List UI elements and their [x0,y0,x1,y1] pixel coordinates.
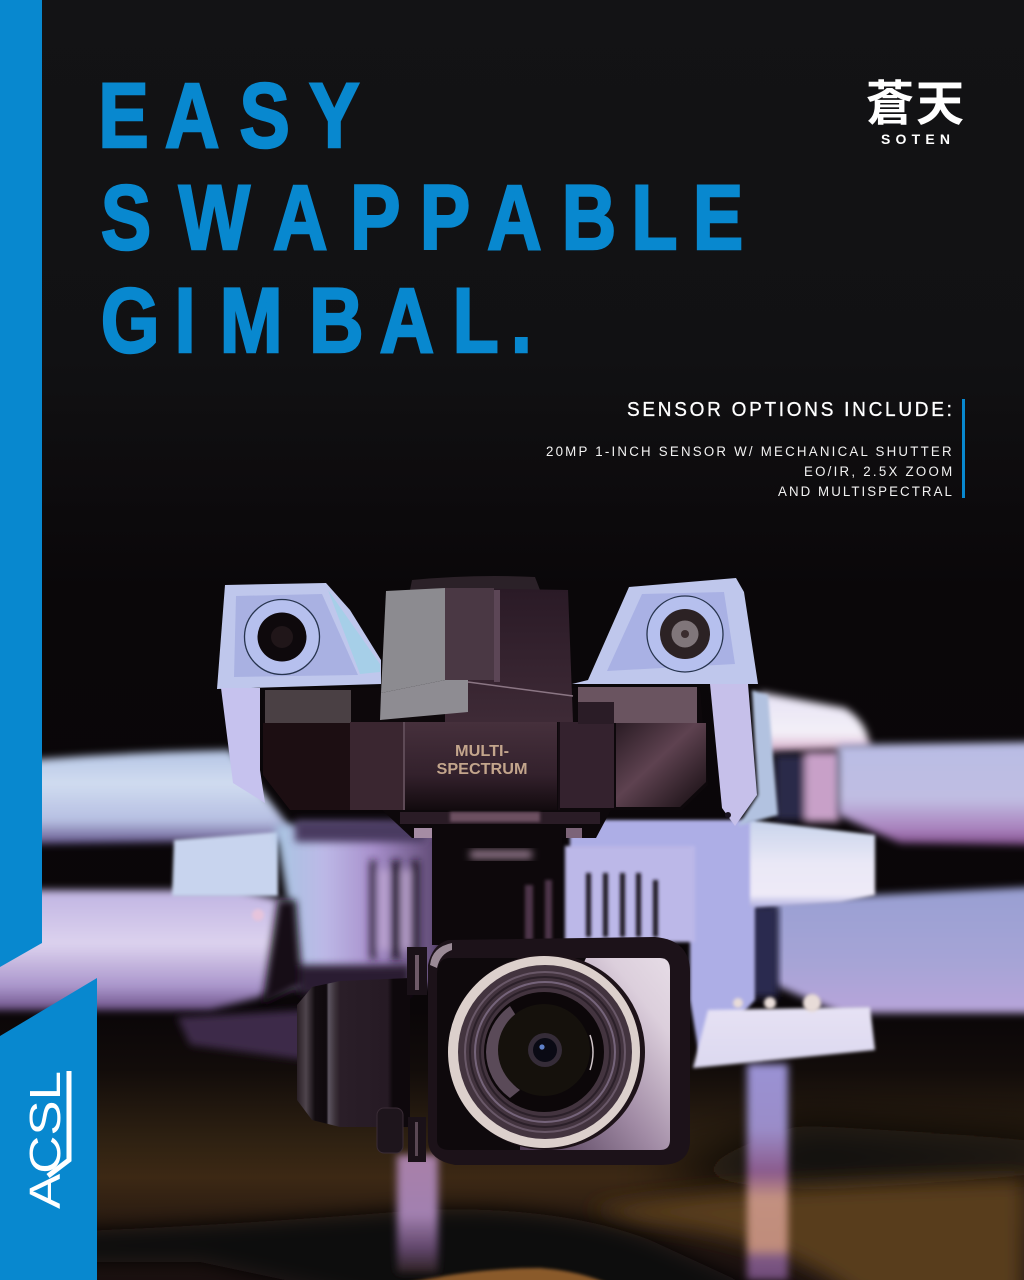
sensor label: MULTI- [455,743,509,760]
side motor [297,978,410,1153]
blue accent rule [962,399,965,498]
vent panel right [565,846,695,942]
sensor label [436,743,528,778]
right lower wing post [752,905,778,997]
table surface [0,1010,1024,1280]
sensor label: SPECTRUM [436,761,528,778]
sensor heading: SENSOR OPTIONS INCLUDE: [627,399,952,421]
right upper wing post [775,752,839,822]
ACSL logo: ACSL [21,1071,70,1209]
top sensor cap [380,576,573,722]
right sensor mount [572,578,778,826]
title: SWAPPABLE [101,166,743,269]
ACSL badge [0,978,97,1280]
sensor list [546,444,952,499]
body left shadow [262,820,425,1005]
lower knob [377,1108,403,1153]
left foot [177,1010,305,1060]
sensor list: EO/IR, 2.5X ZOOM [804,464,952,479]
left lower wing [0,890,305,1010]
right top wing [760,692,870,752]
sensor options text block [546,399,965,499]
sensor list: AND MULTISPECTRAL [778,484,952,499]
multispectral sensor housing [217,576,778,826]
foot lights [733,994,821,1012]
sensor list: 20MP 1-INCH SENSOR W/ MECHANICAL SHUTTER [546,444,952,459]
Soten logo: 蒼天 [866,78,964,131]
icon: left lens [244,600,320,674]
title: EASY [98,64,359,167]
right lower wing [775,887,1024,1013]
icon: right lens [647,596,723,672]
body left [275,825,440,985]
wing dot [252,909,264,921]
left sensor mount [217,583,381,803]
body right [570,820,755,1060]
silver plate [520,958,670,1150]
gimbal neck [380,808,612,945]
title: GIMBAL. [101,269,532,372]
right foot [693,1007,875,1068]
left small arm [172,832,278,896]
sensor block [263,687,708,810]
vents [370,860,658,960]
bracket [407,947,427,1162]
left upper wing [30,750,300,844]
Soten logo: SOTEN [881,131,950,147]
landing legs [397,1064,788,1280]
left accent bar [0,0,42,967]
blurred drone wings and body [0,692,1024,1068]
main lens [448,954,645,1150]
right upper wing [838,742,1024,845]
title [98,64,743,372]
zoom camera [297,937,690,1165]
camera body [428,937,690,1165]
right arm [750,820,875,908]
